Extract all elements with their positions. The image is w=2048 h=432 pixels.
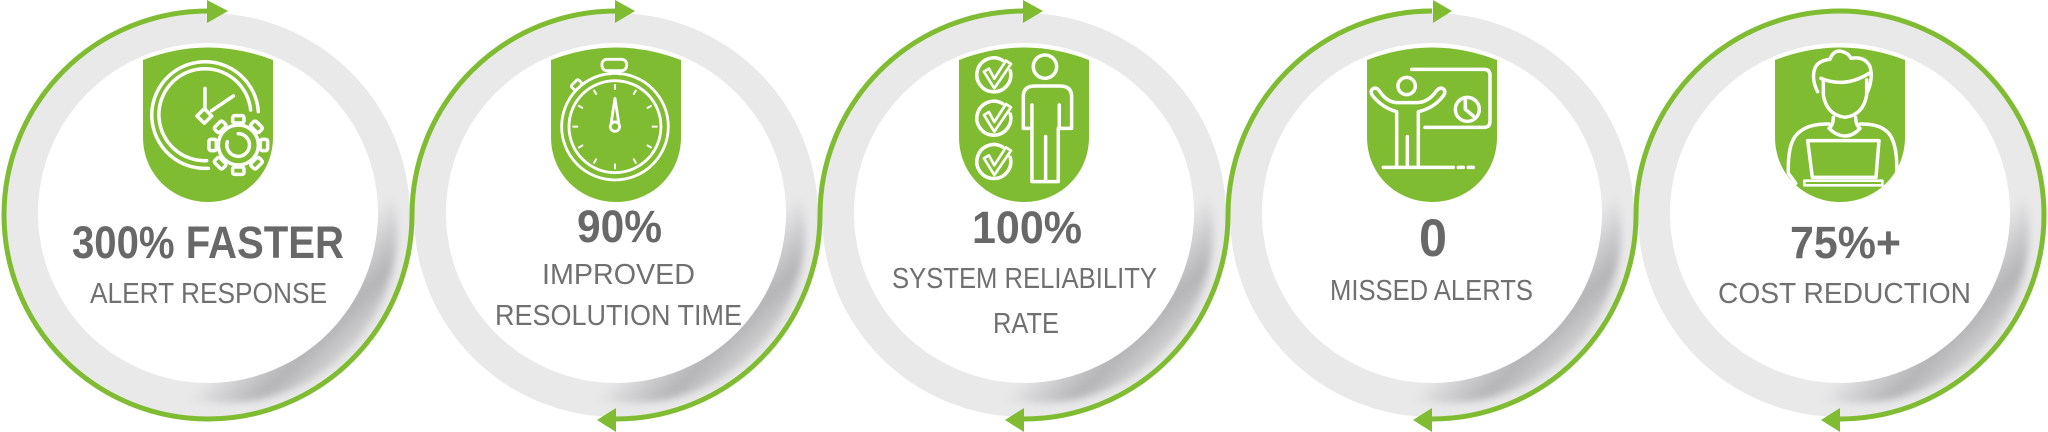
ring shadow <box>1277 59 1621 403</box>
white disc <box>1262 43 1602 383</box>
shield badge <box>959 48 1089 202</box>
white disc <box>1670 43 2010 383</box>
arrow: green S-curve from panel 4 around panel 5 <box>1413 11 2044 432</box>
heading: 0 <box>1419 209 1447 268</box>
shield badge <box>143 48 273 202</box>
ring shadow <box>869 59 1213 403</box>
label line 1: SYSTEM RELIABILITY <box>892 263 1157 295</box>
ring shadow <box>53 59 397 403</box>
grey ring <box>1230 13 1634 417</box>
shield badge <box>551 48 681 202</box>
grey ring <box>822 13 1226 417</box>
label line 2: RATE <box>993 308 1059 340</box>
white disc <box>446 43 786 383</box>
grey ring <box>414 13 818 417</box>
heading: 300% FASTER <box>72 217 344 268</box>
white disc <box>38 43 378 383</box>
panel: 90% improved resolution time <box>414 13 818 417</box>
shield badge <box>1775 48 1905 202</box>
heading: 100% <box>972 202 1082 253</box>
grey ring <box>1638 13 2042 417</box>
arrow: green S-curve from panel 1 to panel 2 <box>4 0 635 419</box>
ring shadow <box>461 59 805 403</box>
panel: 0 missed alerts <box>1230 13 1634 417</box>
panel: 75%+ cost reduction <box>1638 13 2042 417</box>
icon: person at laptop <box>1788 51 1897 185</box>
label: ALERT RESPONSE <box>90 278 327 310</box>
ring shadow <box>1685 59 2029 403</box>
heading: 75%+ <box>1790 217 1901 268</box>
arrow: green S-curve from panel 2 to panel 3 <box>597 0 1043 432</box>
label line 2: RESOLUTION TIME <box>495 300 742 332</box>
arrow: green S-curve from panel 3 to panel 4 <box>1005 0 1452 432</box>
white disc <box>854 43 1194 383</box>
label line 1: IMPROVED <box>542 259 695 291</box>
icon: clock and gear <box>152 62 268 174</box>
label: MISSED ALERTS <box>1330 275 1533 307</box>
icon: checklist and person <box>977 55 1072 182</box>
shield badge <box>1367 48 1497 202</box>
icon: stopwatch <box>562 59 668 180</box>
label: COST REDUCTION <box>1718 278 1971 310</box>
panel: 300% faster alert response <box>6 13 410 417</box>
grey ring <box>6 13 410 417</box>
panel: 100% system reliability rate <box>822 13 1226 417</box>
icon: presenter at board <box>1371 69 1490 167</box>
heading: 90% <box>577 201 662 252</box>
